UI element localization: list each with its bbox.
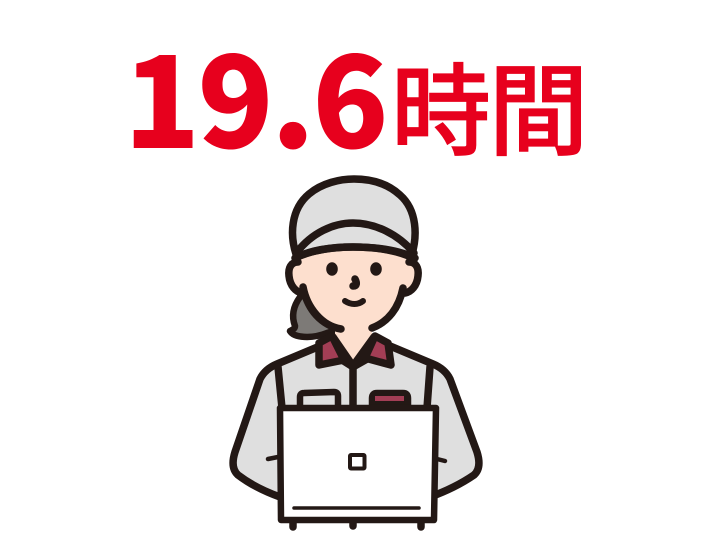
- title: 19.6 hours: [124, 3, 586, 184]
- collar right: [365, 336, 391, 365]
- cap: [293, 179, 415, 258]
- sleeve seams and placket: [268, 367, 445, 461]
- laptop feet: [293, 520, 421, 527]
- title: 19.6 hours: 時間: [391, 31, 586, 176]
- face outline: [289, 262, 418, 329]
- hair ponytail: [290, 290, 340, 337]
- right pocket: [372, 393, 408, 408]
- left pocket: [300, 392, 338, 408]
- nose: [353, 279, 356, 286]
- title: 19.6 hours: 19.6: [124, 3, 386, 184]
- laptop: [280, 408, 436, 520]
- shirt: [233, 346, 479, 497]
- neck and face: [289, 244, 418, 367]
- mouth: [345, 301, 363, 304]
- collar V neckline: [333, 337, 374, 366]
- eyes: [326, 262, 382, 276]
- collar left: [319, 336, 344, 365]
